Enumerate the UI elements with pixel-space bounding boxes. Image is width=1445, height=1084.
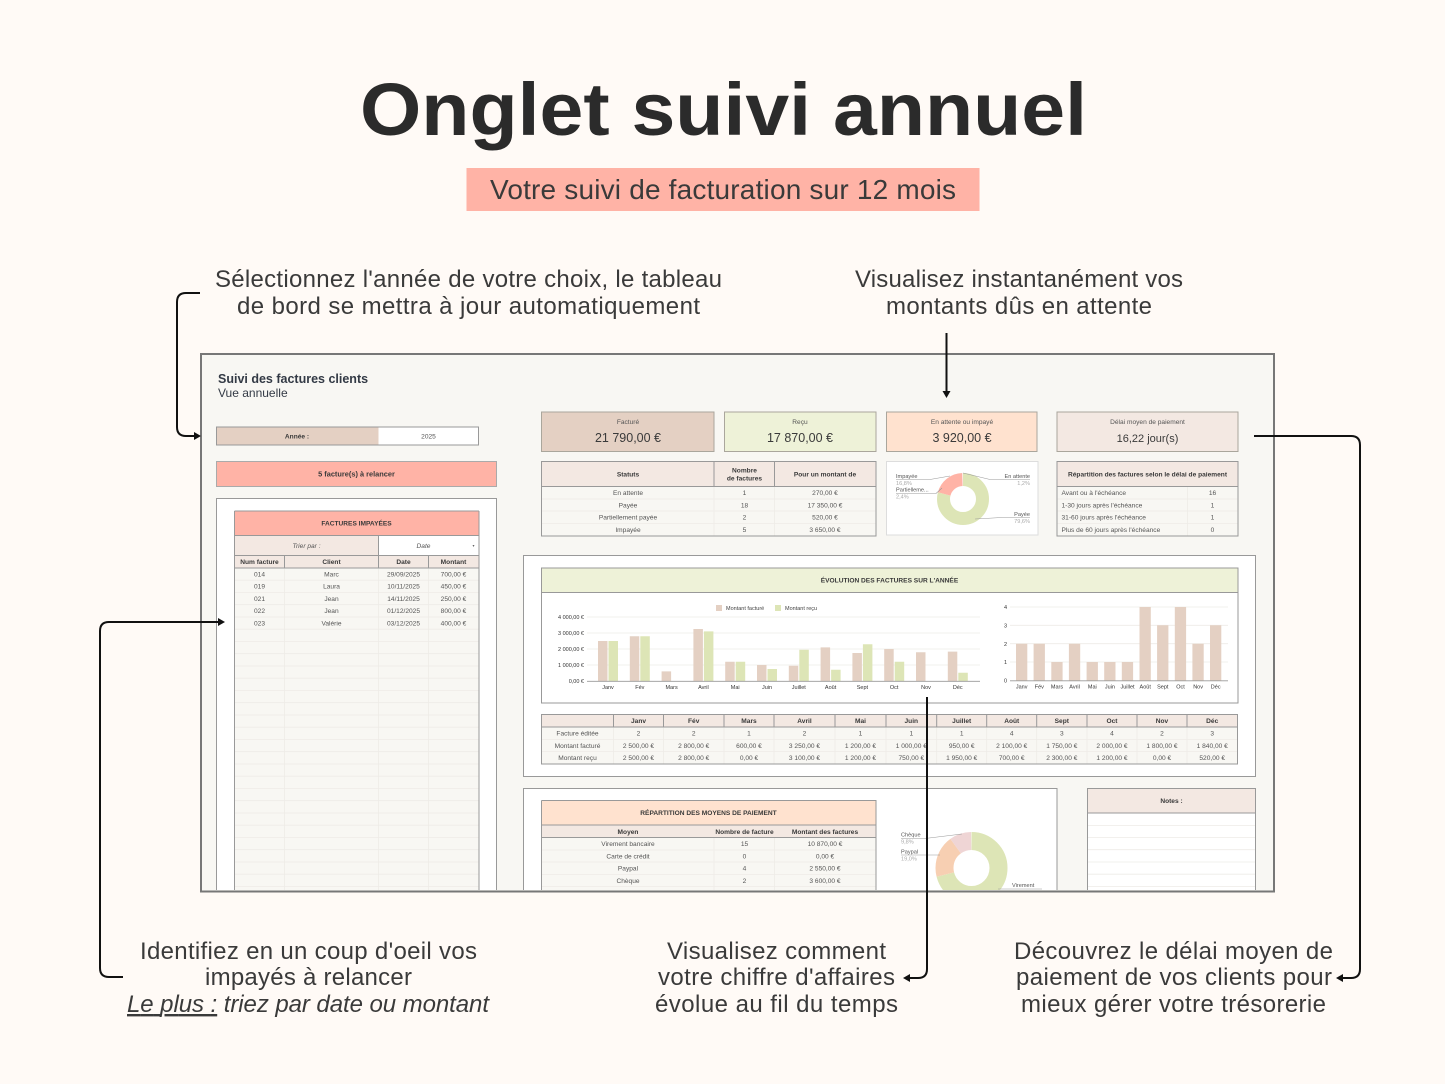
arrow: to pending amount — [942, 333, 950, 398]
table: invoice statuses: 1 — [743, 490, 747, 497]
callout: revenue evolution — [655, 938, 898, 1018]
KPI: invoiced: Facturé — [617, 419, 640, 426]
KPI: pending or unpaid: En attente ou impayé — [931, 419, 993, 426]
table: payment methods: 15 — [741, 841, 748, 848]
bar chart: amounts invoiced and received — [558, 605, 980, 691]
table: invoice statuses: Payée — [619, 502, 638, 509]
table: monthly figures: 2 800,00 € — [678, 755, 710, 762]
table: monthly figures: 1 — [859, 731, 863, 738]
KPI: invoiced — [542, 412, 714, 452]
panel: unpaid invoices: Laura — [323, 584, 340, 591]
bar chart: amounts invoiced and received: Mars — [665, 685, 678, 691]
bar chart: invoices issued: 0 — [1004, 678, 1007, 684]
donut chart: invoice statuses: Partielleme... — [896, 488, 929, 494]
table: monthly figures: 950,00 € — [949, 743, 975, 750]
bar chart: amounts invoiced and received: Déc — [953, 685, 963, 691]
table: monthly figures: 1 — [747, 731, 751, 738]
table: monthly figures: Fév — [688, 718, 700, 725]
bar chart: amounts invoiced and received: Oct — [890, 685, 899, 691]
donut chart: payment methods: Chèque — [901, 832, 921, 838]
table: invoice statuses: 3 650,00 € — [809, 527, 841, 534]
subtitle banner — [466, 168, 980, 211]
donut chart: invoice statuses: En attente — [1004, 474, 1030, 480]
table: payment delay distribution: 1 — [1211, 514, 1215, 522]
KPI: received: 17 870,00 € — [767, 431, 833, 445]
bar chart: amounts invoiced and received: 3 000,00 € — [558, 631, 584, 637]
table: monthly figures — [542, 714, 1238, 764]
bar chart: invoices issued: Janv — [1016, 684, 1028, 690]
bar chart: invoices issued: Juin — [1105, 684, 1115, 690]
bar chart: amounts invoiced and received: Sept — [857, 685, 869, 691]
table: payment methods — [542, 800, 876, 898]
panel: unpaid invoices: Jean — [324, 596, 339, 603]
table: payment methods: 0,00 € — [816, 854, 834, 860]
table: monthly figures: Oct — [1106, 718, 1118, 725]
table: monthly figures: 750,00 € — [898, 755, 924, 762]
table: monthly figures: 1 800,00 € — [1146, 743, 1178, 750]
reminder banner: 5 facture(s) à relancer — [318, 470, 395, 478]
table: invoice statuses: de factures — [727, 476, 762, 482]
bar chart: amounts invoiced and received: 4 000,00 € — [558, 615, 584, 621]
panel: unpaid invoices: 019 — [254, 584, 265, 591]
panel: unpaid invoices: 014 — [254, 572, 265, 578]
table: monthly figures: Mai — [855, 718, 866, 725]
bar chart: invoices issued: Août — [1140, 684, 1151, 690]
table: monthly figures: Août — [1004, 718, 1020, 725]
title: Onglet suivi annuel — [360, 68, 1087, 151]
year selector: Année : — [285, 434, 309, 440]
table: payment methods: Virement bancaire — [601, 841, 655, 848]
table: payment methods: Carte de crédit — [606, 854, 650, 860]
reminder banner — [216, 462, 496, 486]
panel: spreadsheet screenshot — [201, 354, 1274, 898]
table: invoice statuses: Nombre — [732, 468, 757, 474]
table: monthly figures: 2 500,00 € — [623, 743, 654, 750]
bar chart: amounts invoiced and received: Juillet — [792, 685, 806, 691]
KPI: received — [724, 412, 876, 452]
bar chart: invoices issued: Juillet — [1120, 684, 1135, 690]
donut chart: invoice statuses: 2,4% — [896, 494, 909, 500]
table: payment methods: RÉPARTITION DES MOYENS DE PAIEMENT — [640, 808, 777, 817]
table: payment methods: 10 870,00 € — [808, 841, 843, 848]
bar chart: invoices issued: Nov — [1193, 684, 1203, 690]
bar chart: amounts invoiced and received: 1 000,00 € — [558, 663, 584, 669]
table: payment methods: Moyen — [618, 829, 638, 836]
year selector: 2025 — [421, 434, 436, 440]
panel: unpaid invoices: Trier par : — [292, 543, 321, 550]
arrow: to unpaid invoices table — [100, 618, 225, 977]
panel: unpaid invoices: Num facture — [240, 559, 279, 566]
callout: unpaid invoices: Le plus : triez par date ou montant — [127, 991, 490, 1018]
table: monthly figures: 700,00 € — [999, 755, 1025, 762]
bar chart: amounts invoiced and received: 0,00 € — [569, 679, 584, 685]
panel: unpaid invoices: Date — [417, 543, 431, 550]
table: monthly figures: 0,00 € — [740, 755, 758, 762]
table: monthly figures: 2 100,00 € — [996, 743, 1028, 750]
table: monthly figures: 2 800,00 € — [678, 743, 710, 750]
table: monthly figures: 1 200,00 € — [845, 755, 876, 762]
panel: unpaid invoices: Valérie — [321, 620, 342, 627]
panel: unpaid invoices: 023 — [254, 620, 265, 627]
table: invoice statuses — [542, 462, 876, 536]
table: monthly figures: 3 250,00 € — [789, 743, 820, 750]
bar chart: amounts invoiced and received: Fév — [635, 685, 645, 691]
evolution heading: ÉVOLUTION DES FACTURES SUR L'ANNÉE — [821, 576, 959, 584]
panel: unpaid invoices — [216, 498, 496, 898]
table: monthly figures: 2 000,00 € — [1096, 743, 1128, 750]
table: monthly figures: 3 — [1210, 731, 1214, 738]
table: payment delay distribution: 1 — [1211, 502, 1215, 509]
bar chart: invoices issued: 2 — [1004, 642, 1007, 648]
table: invoice statuses: Pour un montant de — [794, 472, 856, 478]
KPI: received: Reçu — [792, 419, 808, 426]
table: payment delay distribution: Répartition des factures selon le délai de paiement — [1068, 472, 1228, 478]
KPI: pending or unpaid — [886, 412, 1037, 452]
table: monthly figures: Avril — [797, 718, 812, 725]
bar chart: invoices issued: Fév — [1035, 684, 1044, 690]
KPI: invoiced: 21 790,00 € — [595, 431, 661, 445]
table: monthly figures: 1 — [909, 731, 913, 738]
KPI: average payment time: 16,22 jour(s) — [1117, 433, 1178, 445]
table: monthly figures: 1 950,00 € — [946, 755, 978, 762]
donut chart: payment methods: Virement — [1012, 883, 1035, 889]
table: invoice statuses: Impayée — [615, 527, 641, 534]
table: monthly figures: 1 000,00 € — [896, 743, 927, 750]
callout: amounts due — [855, 266, 1183, 320]
callout: payment delay: Découvrez le délai moyen de — [1014, 938, 1333, 965]
callout: unpaid invoices — [127, 938, 490, 1018]
table: invoice statuses: 17 350,00 € — [808, 502, 843, 509]
table: payment delay distribution: 31-60 jours après l'échéance — [1062, 514, 1146, 522]
table: payment delay distribution: 0 — [1211, 527, 1215, 534]
table: invoice statuses: 5 — [743, 527, 747, 534]
table: invoice statuses: En attente — [613, 490, 643, 497]
donut chart: payment methods — [901, 832, 1042, 895]
donut chart: invoice statuses: 1,2% — [1017, 481, 1030, 487]
bar chart: invoices issued: 3 — [1004, 624, 1007, 630]
callout: year selection: Sélectionnez l'année de votre choix, le tableau — [215, 266, 722, 293]
table: monthly figures: Déc — [1206, 718, 1219, 725]
table: payment methods: 3 600,00 € — [809, 878, 841, 885]
donut chart: invoice statuses: Payée — [1014, 512, 1030, 518]
table: invoice statuses: 270,00 € — [812, 490, 838, 497]
sheet heading: Suivi des factures clients — [218, 372, 368, 386]
year selector — [216, 427, 478, 445]
table: payment methods: 0 — [743, 854, 747, 860]
sheet heading: Vue annuelle — [218, 386, 288, 400]
table: payment methods: Paypal — [618, 866, 639, 873]
table: payment delay distribution — [1057, 462, 1238, 536]
table: monthly figures: 2 — [1160, 731, 1164, 738]
panel: payment methods — [524, 788, 1057, 898]
callout: amounts due: montants dûs en attente — [886, 293, 1152, 320]
KPI: average payment time — [1057, 412, 1238, 452]
table: invoice statuses: 2 — [743, 514, 747, 522]
table: monthly figures: 2 — [803, 731, 807, 738]
callout: payment delay — [1014, 938, 1333, 1018]
table: payment methods: Montant des factures — [792, 829, 858, 836]
table: monthly figures: Juillet — [952, 718, 972, 725]
table: payment methods: 4 — [743, 866, 747, 873]
panel: unpaid invoices: 700,00 € — [441, 572, 467, 578]
panel: unpaid invoices: ▾ — [472, 543, 475, 548]
table: payment delay distribution: Plus de 60 jours après l'échéance — [1062, 527, 1161, 534]
panel: unpaid invoices: 14/11/2025 — [387, 596, 420, 603]
panel: unpaid invoices: FACTURES IMPAYÉES — [321, 518, 392, 528]
table: monthly figures: Mars — [741, 718, 757, 725]
table: monthly figures: 1 750,00 € — [1046, 743, 1078, 750]
table: monthly figures: 1 200,00 € — [845, 743, 876, 750]
panel: yearly evolution — [524, 556, 1256, 776]
donut chart: invoice statuses — [886, 462, 1038, 535]
panel: notes: Notes : — [1160, 798, 1183, 805]
table: payment methods: 2 550,00 € — [809, 866, 841, 873]
callout: year selection — [215, 266, 722, 320]
arrow: to year selector — [177, 293, 201, 440]
table: monthly figures: 3 100,00 € — [789, 755, 820, 762]
table: monthly figures: 0,00 € — [1153, 755, 1171, 762]
table: payment delay distribution: 1-30 jours après l'échéance — [1062, 502, 1143, 509]
donut chart: payment methods: Paypal — [901, 850, 918, 856]
bar chart: amounts invoiced and received: Avril — [698, 685, 709, 691]
panel: unpaid invoices: 29/09/2025 — [387, 572, 420, 578]
table: monthly figures: Facture éditée — [556, 731, 599, 738]
bar chart: amounts invoiced and received: Montant facturé — [726, 606, 764, 612]
donut chart: payment methods: 19,0% — [901, 856, 917, 862]
bar chart: invoices issued: Avril — [1069, 684, 1080, 690]
donut chart: invoice statuses: Impayée — [896, 474, 917, 480]
callout: amounts due: Visualisez instantanément vos — [855, 266, 1183, 293]
bar chart: invoices issued: Mars — [1051, 684, 1063, 690]
table: monthly figures: 3 — [1060, 731, 1064, 738]
panel: notes — [1088, 788, 1256, 898]
KPI: pending or unpaid: 3 920,00 € — [932, 431, 992, 445]
callout: payment delay: mieux gérer votre trésorerie — [1021, 991, 1326, 1018]
table: payment delay distribution: Avant ou à l'échéance — [1062, 490, 1126, 497]
callout: unpaid invoices: Identifiez en un coup d'oeil vos — [140, 938, 477, 965]
table: monthly figures: Sept — [1055, 718, 1070, 725]
bar chart: amounts invoiced and received: Nov — [921, 685, 931, 691]
table: invoice statuses: 18 — [741, 502, 748, 509]
panel: unpaid invoices: Date — [396, 559, 411, 566]
donut chart: invoice statuses: 16,8% — [896, 481, 912, 487]
table: monthly figures: 2 — [692, 731, 696, 738]
table: monthly figures: 1 200,00 € — [1096, 755, 1128, 762]
bar chart: invoices issued: 1 — [1004, 660, 1007, 666]
panel: unpaid invoices: 021 — [254, 596, 265, 603]
bar chart: amounts invoiced and received: Août — [825, 685, 837, 691]
table: invoice statuses: 520,00 € — [812, 514, 838, 522]
table: monthly figures: Montant facturé — [555, 743, 601, 750]
panel: unpaid invoices: Jean — [324, 608, 339, 615]
table: monthly figures: Nov — [1156, 718, 1169, 725]
table: payment methods: Chèque — [616, 878, 640, 885]
bar chart: amounts invoiced and received: Juin — [762, 685, 772, 691]
table: invoice statuses: Statuts — [617, 472, 640, 478]
bar chart: amounts invoiced and received: Montant reçu — [785, 606, 817, 612]
callout: payment delay: paiement de vos clients pour — [1016, 964, 1332, 991]
panel: unpaid invoices: 450,00 € — [441, 584, 467, 591]
sheet heading — [218, 374, 368, 397]
bar chart: invoices issued: Déc — [1211, 684, 1221, 690]
table: monthly figures: 600,00 € — [736, 743, 762, 750]
panel: unpaid invoices: Montant — [441, 559, 467, 566]
evolution heading — [542, 568, 1238, 592]
bar chart: amounts invoiced and received: Mai — [731, 685, 740, 691]
callout: revenue evolution: votre chiffre d'affaires — [658, 964, 895, 991]
subtitle banner: Votre suivi de facturation sur 12 mois — [490, 174, 956, 205]
table: monthly figures: 4 — [1010, 731, 1014, 738]
table: monthly figures: 1 — [960, 731, 964, 738]
table: payment delay distribution: 16 — [1209, 490, 1216, 497]
panel: unpaid invoices: 01/12/2025 — [387, 608, 420, 615]
table: monthly figures: Janv — [631, 718, 646, 725]
bar chart: invoices issued: Sept — [1157, 684, 1169, 690]
panel: unpaid invoices: 10/11/2025 — [387, 584, 420, 591]
table: monthly figures: 1 840,00 € — [1197, 743, 1228, 750]
table: invoice statuses: Partiellement payée — [599, 514, 657, 522]
panel: unpaid invoices: 022 — [254, 608, 265, 615]
KPI: average payment time: Délai moyen de paiement — [1110, 419, 1185, 426]
callout: revenue evolution: Visualisez comment — [667, 938, 886, 965]
panel: unpaid invoices: Marc — [324, 572, 340, 578]
arrow: chart to revenue callout — [903, 697, 927, 982]
table: monthly figures: 4 — [1110, 731, 1114, 738]
panel: unpaid invoices: 800,00 € — [441, 608, 467, 615]
callout: unpaid invoices: impayés à relancer — [205, 964, 412, 991]
panel: unpaid invoices: Client — [322, 559, 341, 566]
panel: unpaid invoices: 03/12/2025 — [387, 620, 420, 627]
bar chart: invoices issued: Mai — [1088, 684, 1097, 690]
panel: unpaid invoices: 400,00 € — [441, 620, 467, 627]
table: monthly figures: 2 300,00 € — [1046, 755, 1078, 762]
bar chart: invoices issued — [1004, 605, 1228, 690]
callout: revenue evolution: évolue au fil du temps — [655, 991, 898, 1018]
table: monthly figures: 520,00 € — [1199, 755, 1225, 762]
table: monthly figures: Juin — [905, 718, 918, 725]
bar chart: invoices issued: 4 — [1004, 605, 1007, 611]
table: payment methods: Nombre de facture — [715, 829, 774, 836]
bar chart: invoices issued: Oct — [1176, 684, 1185, 690]
panel: unpaid invoices: 250,00 € — [441, 596, 467, 603]
arrow: payment delay to callout — [1254, 436, 1360, 982]
table: monthly figures: Montant reçu — [558, 755, 597, 762]
table: monthly figures: 2 500,00 € — [623, 755, 654, 762]
callout: year selection: de bord se mettra à jour automatiquement — [237, 293, 700, 320]
donut chart: payment methods: 9,8% — [901, 840, 914, 846]
bar chart: amounts invoiced and received: 2 000,00 € — [558, 647, 584, 653]
table: payment methods: 2 — [743, 878, 747, 885]
donut chart: invoice statuses: 79,6% — [1014, 519, 1030, 525]
bar chart: amounts invoiced and received: Janv — [602, 685, 614, 691]
table: monthly figures: 2 — [637, 731, 641, 738]
